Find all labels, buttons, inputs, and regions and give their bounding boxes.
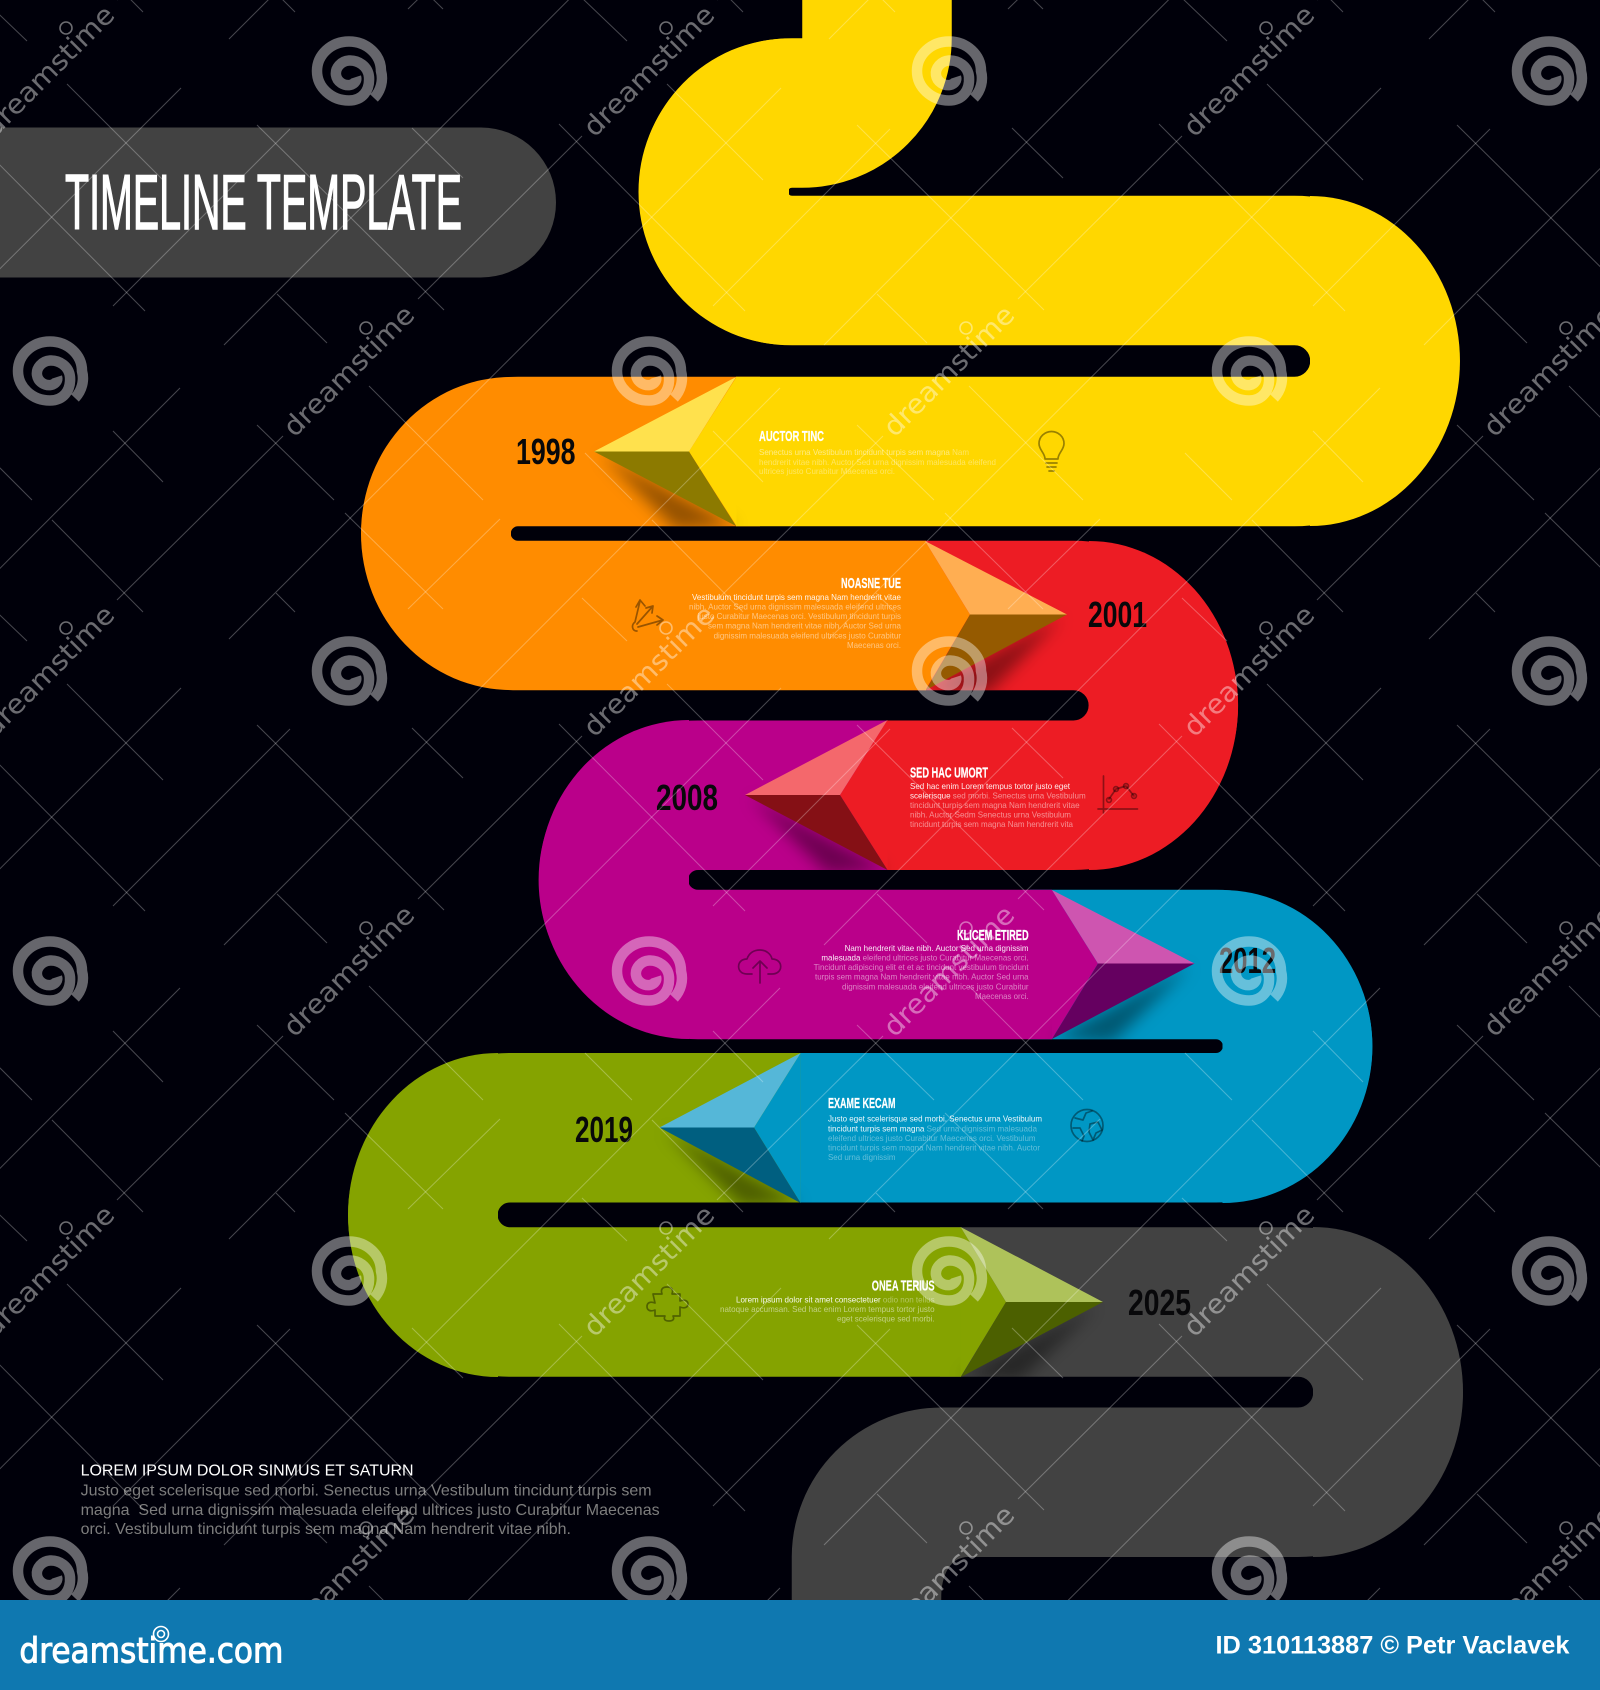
text block: Sed Hac Umort: tincidunt turpis sem magna Nam hendrerit vitae <box>910 800 1080 810</box>
watermark overlay: dreamstime <box>278 300 421 443</box>
watermark overlay: dreamstime <box>878 300 1021 443</box>
text block: Onea Terius: eget scelerisque sed morbi. <box>837 1314 935 1324</box>
text block: Klicem Etired: Nam hendrerit vitae nibh. Auctor Sed urna dignissim <box>845 943 1029 953</box>
icon: line chart <box>1098 776 1138 813</box>
text block: Noasne Tue: Vestibulum tincidunt turpis sem magna Nam hendrerit vitae <box>692 592 901 602</box>
icon: branching arrows <box>633 600 663 631</box>
watermark overlay: dreamstime <box>1178 1200 1321 1343</box>
text block: Exame Kecam <box>828 1095 1042 1162</box>
watermark overlay: dreamstime <box>278 900 421 1043</box>
ribbon segment: green <box>348 1053 961 1377</box>
text block: Noasne Tue: justo Curabitur Maecenas orci. Vestibulum tincidunt turpis <box>697 611 901 621</box>
text block: Sed Hac Umort: SED HAC UMORT <box>910 764 988 781</box>
note block bottom left: orci. Vestibulum tincidunt turpis sem magna Nam hendrerit vitae nibh. <box>81 1521 571 1538</box>
text block: Klicem Etired: Tincidunt adipiscing elit et et ac tincidunt vestibulum tincidunt <box>814 962 1029 972</box>
ribbon segment: yellow <box>639 0 1460 526</box>
watermark overlay: dreamstime <box>1178 600 1321 743</box>
text block: Noasne Tue: NOASNE TUE <box>841 575 901 592</box>
text block: Exame Kecam: EXAME KECAM <box>828 1095 896 1112</box>
text block: Sed Hac Umort: nibh. Auctor Sedm Senectus urna Vestibulum <box>910 809 1071 819</box>
text block: Exame Kecam: tincidunt turpis sem magna Sed urna dignissim malesuada <box>828 1123 1037 1133</box>
watermark overlay: dreamstime <box>578 0 721 143</box>
text block: Sed Hac Umort: Sed hac enim Lorem tempus tortor justo eget <box>910 781 1071 791</box>
icon: cloud upload <box>739 950 781 983</box>
text block: Noasne Tue: nibh. Auctor Sed urna dignissim malesuada eleifend ultrices <box>689 601 901 611</box>
year 2019: 2019 <box>575 1109 633 1150</box>
text block: Auctor Tinc: AUCTOR TINC <box>759 428 824 445</box>
icon: puzzle piece <box>647 1287 688 1321</box>
arrow 1998 <box>594 377 736 530</box>
arrow 2019 <box>660 1053 801 1207</box>
text block: Onea Terius: Lorem ipsum dolor sit amet consectetuer odio non tellus <box>736 1294 935 1304</box>
text block: Klicem Etired: Maecenas orci. <box>975 991 1029 1001</box>
text block: Klicem Etired: KLICEM ETIRED <box>957 927 1029 944</box>
watermark overlay: dreamstime <box>878 1500 1021 1643</box>
text block: Noasne Tue: sem magna Nam hendrerit vitae nibh. Auctor Sed urna <box>708 621 901 631</box>
title: TIMELINE TEMPLATE <box>65 158 462 246</box>
text block: Sed Hac Umort <box>910 764 1086 829</box>
text block: Sed Hac Umort: scelerisque sed morbi. Senectus urna Vestibulum <box>910 791 1086 801</box>
arrow 2025 <box>961 1227 1103 1381</box>
note block bottom left: LOREM IPSUM DOLOR SINMUS ET SATURN <box>81 1463 414 1480</box>
text block: Onea Terius <box>720 1278 935 1324</box>
watermark overlay: dreamstime <box>878 900 1021 1043</box>
icon: light bulb <box>1039 432 1064 471</box>
note block bottom left <box>81 1463 660 1538</box>
text block: Auctor Tinc <box>759 428 996 476</box>
footer logo text: dreamstime.com <box>19 1632 283 1672</box>
watermark overlay: dreamstime <box>278 1500 421 1643</box>
footer image id and credit: ID 310113887 © Petr Vaclavek <box>1216 1632 1570 1660</box>
text block: Klicem Etired: turpis sem magna Nam hendrerit vitae nibh. Auctor Sed urna <box>815 972 1029 982</box>
year 2008: 2008 <box>656 777 718 818</box>
icon: globe <box>1071 1110 1103 1142</box>
text block: Klicem Etired: malesuada eleifend ultrices justo Curabitur Maecenas orci. <box>821 953 1029 963</box>
text block: Auctor Tinc: Senectus urna Vestibulum tincidunt turpis sem magna Nam <box>759 447 969 457</box>
year 2012: 2012 <box>1219 940 1276 981</box>
text block: Exame Kecam: Sed urna dignissim <box>828 1152 896 1162</box>
title pill <box>0 128 556 278</box>
ribbon segment: gray <box>866 1227 1463 1600</box>
text block: Onea Terius: natoque accumsan. Sed hac enim Lorem tempus tortor justo <box>720 1304 935 1314</box>
ribbon segment: magenta <box>539 720 1052 1039</box>
watermark overlay: dreamstime <box>578 600 721 743</box>
text block: Klicem Etired <box>814 927 1029 1001</box>
watermark overlay: dreamstime <box>1178 0 1321 143</box>
year 1998: 1998 <box>516 431 576 472</box>
text block: Sed Hac Umort: tincidunt turpis sem magna Nam hendrerit vita <box>910 819 1073 829</box>
note block bottom left: Justo eget scelerisque sed morbi. Senectus urna Vestibulum tincidunt turpis sem <box>81 1482 652 1500</box>
text block: Exame Kecam: Justo eget scelerisque sed morbi. Senectus urna Vestibulum <box>828 1114 1042 1124</box>
arrow 2001 <box>925 541 1067 694</box>
ribbon segment: red <box>888 541 1238 870</box>
text block: Onea Terius: ONEA TERIUS <box>872 1278 935 1295</box>
arrow 2008 <box>745 720 888 874</box>
year 2001: 2001 <box>1088 594 1147 635</box>
footer logo spiral <box>154 1626 168 1642</box>
ribbon segment: orange <box>361 377 926 690</box>
ribbon segment: blue <box>801 890 1372 1203</box>
footer bar <box>0 1600 1600 1690</box>
text block: Auctor Tinc: ultrices justo Curabitur Maecenas orci. <box>759 466 895 476</box>
year 2025: 2025 <box>1128 1282 1191 1323</box>
text block: Klicem Etired: dignissim malesuada eleifend ultrices justo Curabitur <box>842 981 1029 991</box>
note block bottom left: magna Sed urna dignissim malesuada eleifend ultrices justo Curabitur Maecenas <box>81 1502 660 1519</box>
text block: Noasne Tue <box>689 575 901 650</box>
watermark overlay: dreamstime <box>578 1200 721 1343</box>
text block: Noasne Tue: Maecenas orci. <box>847 640 901 650</box>
arrow 2012 <box>1052 890 1194 1043</box>
text block: Noasne Tue: dignissim malesuada eleifend ultrices justo Curabitur <box>714 630 901 640</box>
text block: Auctor Tinc: hendrerit vitae nibh. Auctor Sed urna dignissim malesuada eleifend <box>759 457 996 467</box>
text block: Exame Kecam: tincidunt turpis sem magna Nam hendrerit vitae nibh. Auctor <box>828 1142 1040 1152</box>
text block: Exame Kecam: eleifend ultrices justo Curabitur Maecenas orci. Vestibulum <box>828 1133 1036 1143</box>
